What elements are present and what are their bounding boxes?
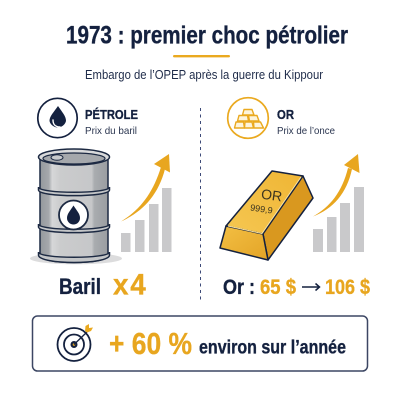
or price from: 65 $	[260, 276, 296, 299]
arrow: or rise	[313, 154, 360, 216]
arrow: petrole rise	[121, 154, 170, 222]
icon: target with arrow	[58, 324, 93, 361]
subtitle: Embargo de l’OPEP après la guerre du Kippour	[85, 68, 323, 82]
central divider	[200, 108, 202, 300]
icon: oil drop	[38, 98, 77, 138]
icon: price arrow	[302, 284, 320, 290]
baril label: Baril	[59, 274, 101, 299]
petrole heading: PÉTROLE	[85, 107, 138, 122]
title underline	[173, 55, 230, 57]
plus sixty percent: + 60 %	[109, 326, 192, 361]
icon: gold bars	[228, 98, 268, 138]
title: 1973 : premier choc pétrolier	[66, 22, 348, 50]
panel: or	[220, 98, 370, 299]
or sublabel: Prix de l’once	[277, 125, 335, 137]
or price label: Or :	[223, 276, 255, 299]
ingot engraving	[250, 186, 283, 216]
barrel shadow	[30, 253, 122, 264]
icon: oil barrel	[38, 149, 110, 262]
ingot engraving: OR	[260, 186, 283, 204]
or heading: OR	[277, 107, 295, 122]
or price to: 106 $	[325, 276, 370, 299]
bar chart: petrole	[121, 188, 172, 252]
petrole sublabel: Prix du baril	[85, 125, 137, 137]
panel: petrole	[30, 98, 172, 302]
times four value: x	[113, 269, 129, 302]
callout	[32, 316, 368, 371]
ingot engraving: 999,9	[250, 203, 273, 216]
times four value: 4	[130, 269, 146, 302]
callout text: environ sur l’année	[199, 338, 346, 358]
icon: gold ingot	[220, 171, 313, 260]
bar chart: or	[313, 187, 364, 252]
